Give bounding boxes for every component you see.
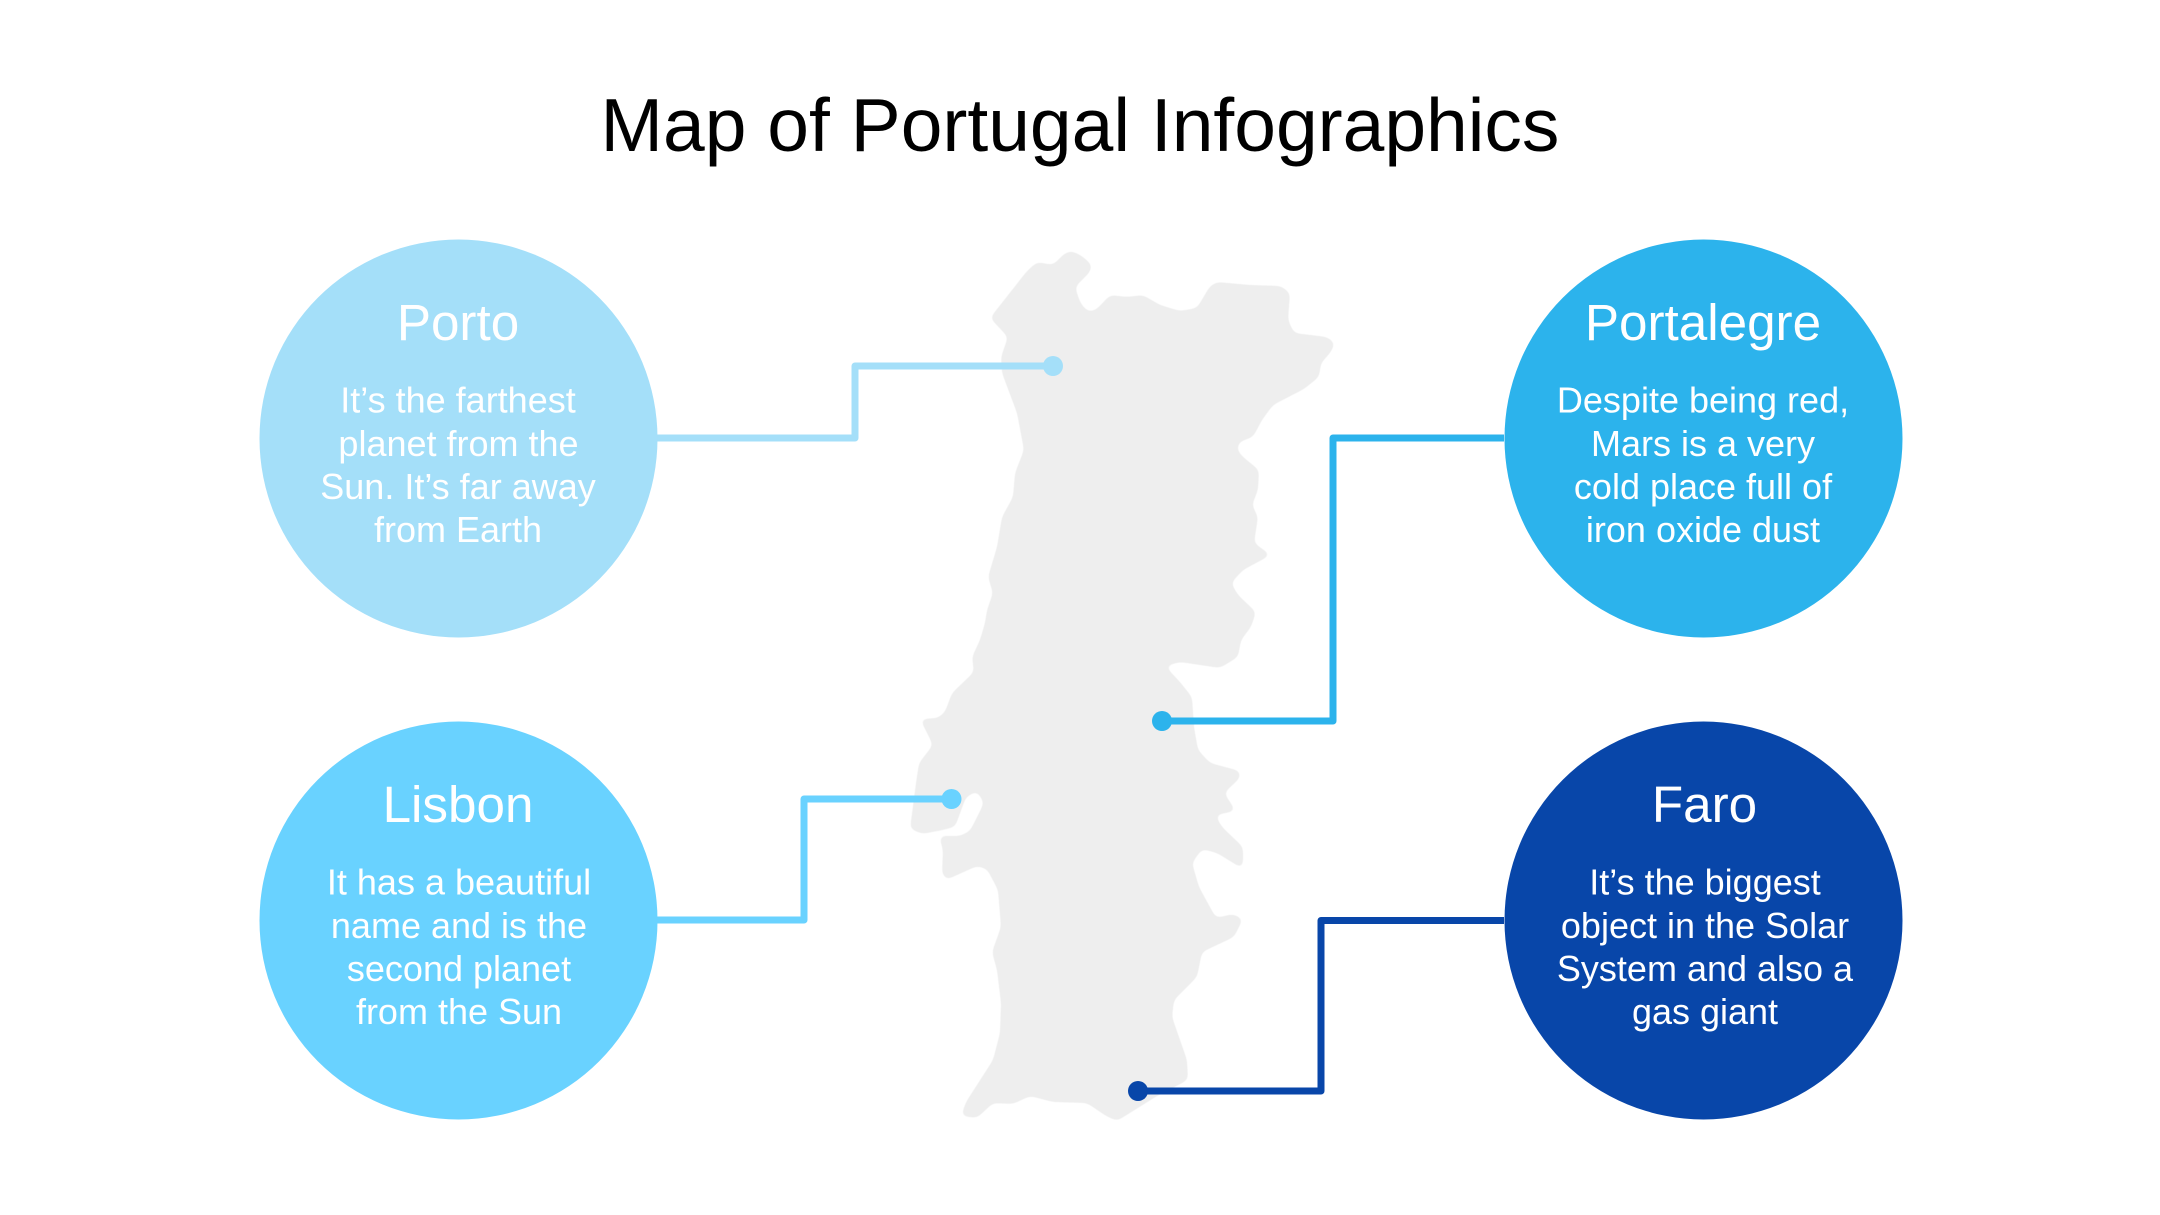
text block: Faro description: object in the Solar <box>1561 905 1849 946</box>
text block: Lisbon description: from the Sun <box>356 991 562 1032</box>
text block: Portalegre description: Despite being red, <box>1557 380 1849 420</box>
panel: Faro <box>1504 722 1902 1120</box>
connector: Faro <box>1128 920 1504 1101</box>
text block: Portalegre description: Mars is a very <box>1591 423 1815 464</box>
map of Portugal <box>910 251 1335 1121</box>
connector: Porto <box>657 356 1063 438</box>
text block: Porto description: It’s the farthest <box>340 380 576 420</box>
panel: Lisbon <box>260 722 658 1120</box>
heading: Portalegre: Portalegre <box>1585 294 1821 351</box>
panel: Porto <box>260 240 658 638</box>
connector: Portalegre <box>1152 438 1504 731</box>
heading: Lisbon: Lisbon <box>383 776 533 833</box>
text block: Portalegre description: cold place full of <box>1574 466 1833 507</box>
text block: Porto description: planet from the <box>338 423 579 464</box>
text block: Portalegre description <box>1557 380 1849 550</box>
panel: Portalegre <box>1504 240 1902 638</box>
connector: Lisbon <box>657 789 962 920</box>
text block: Lisbon description <box>327 862 591 1032</box>
text block: Porto description: from Earth <box>374 509 542 550</box>
heading: Faro: Faro <box>1652 776 1757 833</box>
text block: Lisbon description: second planet <box>347 948 571 989</box>
text block: Lisbon description: It has a beautiful <box>327 862 591 902</box>
text block: Lisbon description: name and is the <box>331 905 587 946</box>
text block: Faro description: gas giant <box>1632 991 1778 1032</box>
title: Map of Portugal Infographics <box>601 83 1559 167</box>
text block: Faro description: System and also a <box>1557 948 1854 989</box>
text block: Portalegre description: iron oxide dust <box>1586 509 1820 550</box>
text block: Faro description: It’s the biggest <box>1589 862 1821 902</box>
text block: Porto description: Sun. It’s far away <box>320 466 596 507</box>
text block: Porto description <box>320 380 596 550</box>
heading: Porto: Porto <box>397 294 519 351</box>
text block: Faro description <box>1557 862 1854 1032</box>
